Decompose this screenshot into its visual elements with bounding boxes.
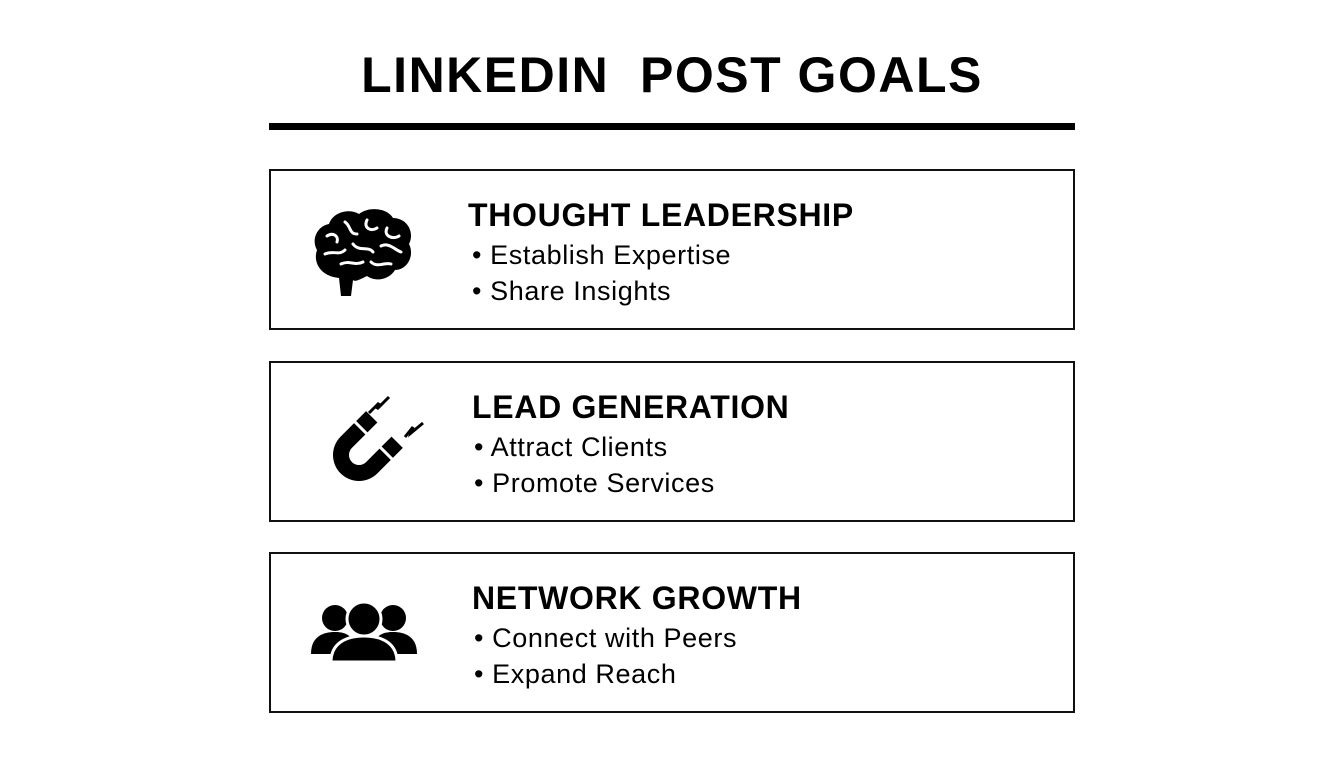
- heading: THOUGHT LEADERSHIP: [468, 197, 854, 233]
- panel: network growth: [269, 552, 1075, 713]
- title underline: [269, 123, 1075, 130]
- heading: LEAD GENERATION: [472, 389, 789, 425]
- bullets: [474, 432, 715, 498]
- bullets: • Promote Services: [474, 468, 715, 498]
- icon: magnet: [333, 396, 424, 481]
- bullets: [472, 240, 731, 306]
- bullets: [474, 623, 737, 689]
- heading: NETWORK GROWTH: [472, 580, 802, 616]
- bullets: • Connect with Peers: [474, 623, 737, 653]
- panel: lead generation: [269, 361, 1075, 522]
- bullets: • Establish Expertise: [472, 240, 731, 270]
- title: LINKEDIN POST GOALS: [361, 47, 983, 103]
- bullets: • Expand Reach: [474, 659, 676, 689]
- bullets: • Share Insights: [472, 276, 671, 306]
- bullets: • Attract Clients: [474, 432, 668, 462]
- panel: thought leadership: [269, 169, 1075, 330]
- icon: brain: [314, 209, 412, 296]
- icon: people: [311, 604, 417, 660]
